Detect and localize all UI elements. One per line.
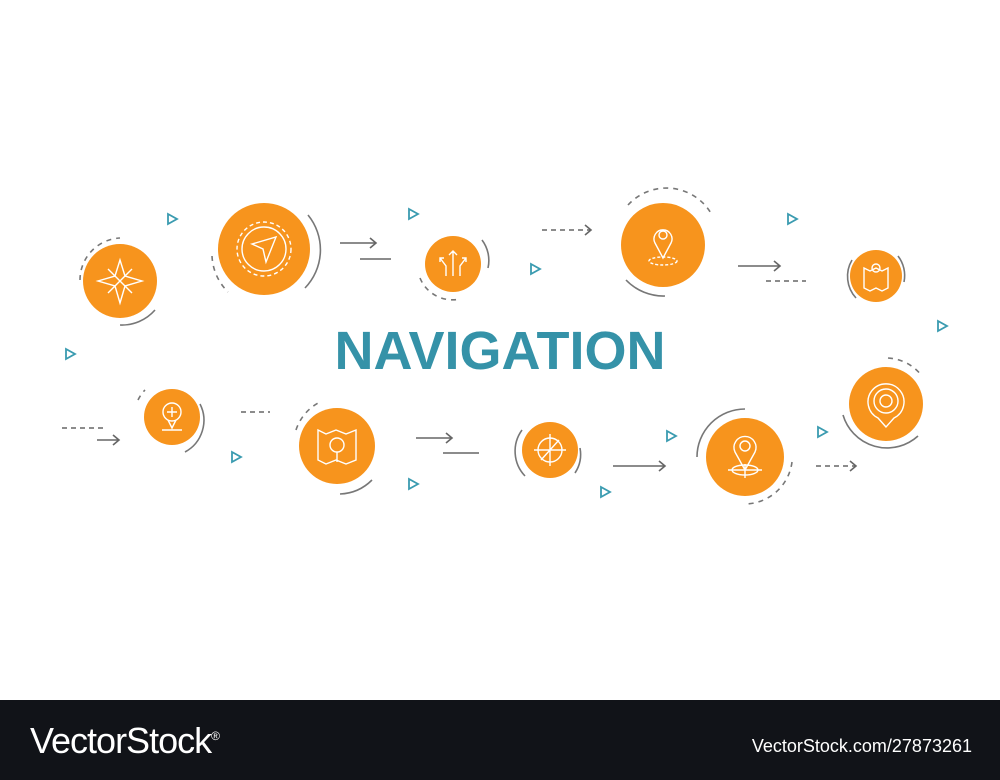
connector arrows [62,225,856,471]
orange circles with icons [83,203,923,496]
icon: pin on target [734,436,756,470]
arcs decorative around circles [80,238,120,280]
icon: location pin [654,230,672,258]
icon: compass [538,438,562,462]
icon: target pin [868,384,904,427]
icon: map magnifier [318,430,356,464]
footer bar [0,700,1000,780]
footer logo: VectorStock® [30,720,219,761]
title: NAVIGATION [334,321,666,381]
icon: compass rose [98,260,142,303]
icon: pin plus [163,403,181,421]
icon: split arrows [440,251,466,276]
footer url: VectorStock.com/27873261 [752,736,972,756]
teal triangles [66,209,947,497]
icon: navigation [242,227,286,271]
icon: map pin small [864,268,888,291]
